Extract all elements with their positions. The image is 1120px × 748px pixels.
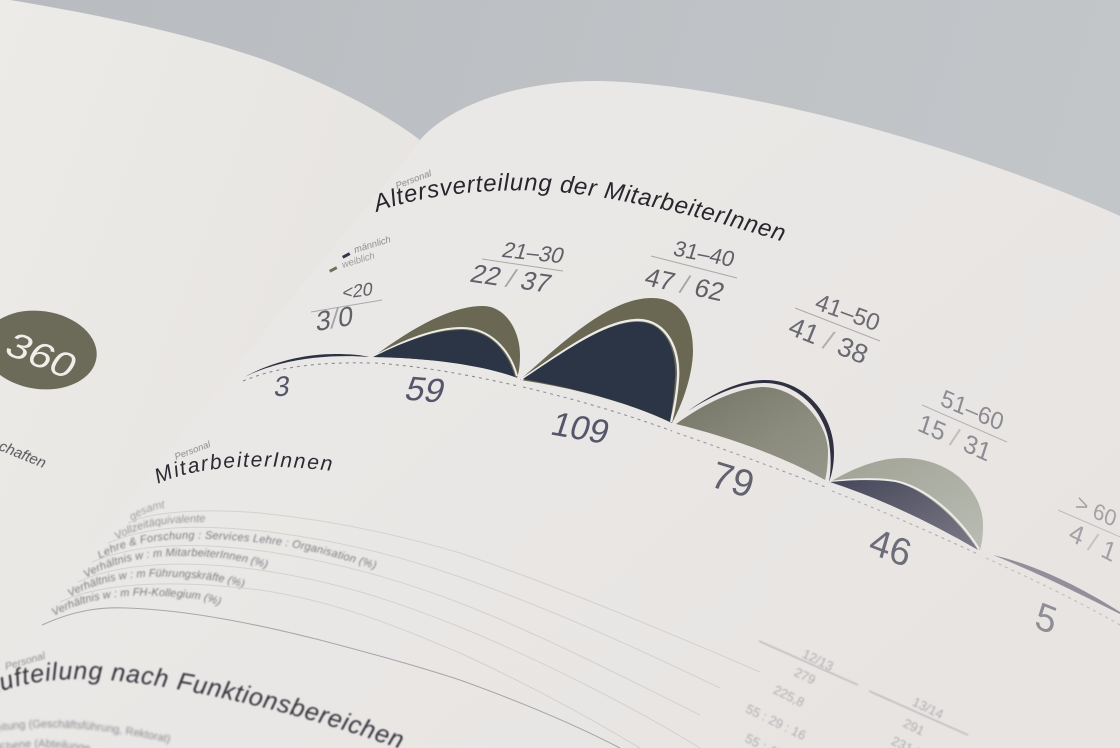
group: 51-60: 51–60 — [938, 385, 1007, 437]
group: 41-50 — [784, 289, 884, 370]
heading: age distribution: Altersverteilung der MitarbeiterInnen — [376, 173, 785, 241]
group: over 60 — [1058, 490, 1120, 568]
total values — [273, 369, 1061, 644]
row: full-time: Vollzeitäquivalente — [114, 514, 206, 538]
section label: Personal: Personal — [394, 168, 434, 192]
bell: 51-60 — [830, 458, 983, 550]
group: 41-50: 41 / 38 — [784, 311, 872, 370]
group: under 20: 3/0 — [315, 299, 354, 337]
row: staff ratio: Verhältnis w : m MitarbeiterInnen (%) — [82, 548, 268, 577]
group: 51-60: 15 / 31 — [915, 409, 994, 468]
row: managers ratio: Verhältnis w : m Führungskräfte (%) — [66, 568, 246, 596]
bell: 21-30 — [373, 306, 520, 378]
column: 12/13: 279 — [792, 664, 818, 687]
group: 41-50: 41–50 — [812, 289, 884, 337]
total badge: 360 — [0, 325, 85, 386]
legend: male: männlich — [353, 234, 392, 256]
legend: female: weiblich — [341, 250, 376, 271]
column: 13/14: 13/14 — [910, 694, 946, 722]
row rules — [60, 511, 760, 748]
total badge — [0, 303, 102, 397]
row labels — [51, 500, 377, 616]
bell: 31-40 — [520, 298, 693, 423]
group: over 60: 4 / 1 — [1066, 517, 1120, 568]
total: over 60: 5 — [1031, 594, 1061, 644]
row: total: gesamt — [130, 500, 165, 523]
bell: 41-50 — [676, 380, 834, 482]
group: 21-30: 22 / 37 — [467, 259, 556, 298]
total: 21-30: 59 — [401, 370, 450, 410]
column: 12/13: 12/13 — [800, 646, 836, 674]
total: 41-50: 79 — [706, 454, 759, 507]
group: 21-30: 21–30 — [499, 238, 568, 268]
staff table — [42, 500, 968, 748]
group: 31-40: 31–40 — [671, 236, 738, 272]
functional areas rows — [0, 718, 171, 748]
section label: Personal: Personal — [173, 439, 213, 463]
group: under 20: <20 — [341, 278, 374, 303]
column: 13/14: 291 — [901, 715, 927, 738]
row: faculty ratio: Verhältnis w : m FH-Kollegium (%) — [51, 587, 222, 616]
column: 12/13: 225,8 — [771, 682, 807, 710]
column: 13/14 — [869, 691, 968, 748]
bell chart: age groups — [243, 298, 1120, 626]
table columns — [743, 641, 968, 748]
group: 31-40: 47 / 62 — [641, 262, 728, 307]
group: 51-60 — [915, 385, 1007, 468]
group: 21-30 — [467, 238, 568, 298]
column: 12/13 — [743, 641, 858, 748]
bell: over 60 — [993, 555, 1120, 614]
age group labels — [311, 236, 1120, 568]
group: 31-40 — [641, 236, 738, 307]
row: teaching and research: Lehre & Forschung : Services Lehre : Organisation (%) — [97, 530, 377, 571]
legend — [329, 234, 392, 273]
column: 12/13: 55 : 29 : 16 — [743, 701, 808, 743]
bell: under 20 — [243, 354, 369, 378]
panel: left page — [0, 0, 420, 660]
group: over 60: > 60 — [1073, 490, 1120, 532]
total: 51-60: 46 — [865, 521, 916, 576]
section label: Personal: Personal — [4, 650, 47, 673]
total: under 20: 3 — [273, 369, 292, 403]
group: under 20 — [311, 278, 382, 337]
total: 31-40: 109 — [547, 405, 614, 452]
heading: staff: MitarbeiterInnen — [156, 452, 332, 484]
dotted baseline — [243, 363, 1120, 626]
table bottom rule — [42, 608, 620, 748]
